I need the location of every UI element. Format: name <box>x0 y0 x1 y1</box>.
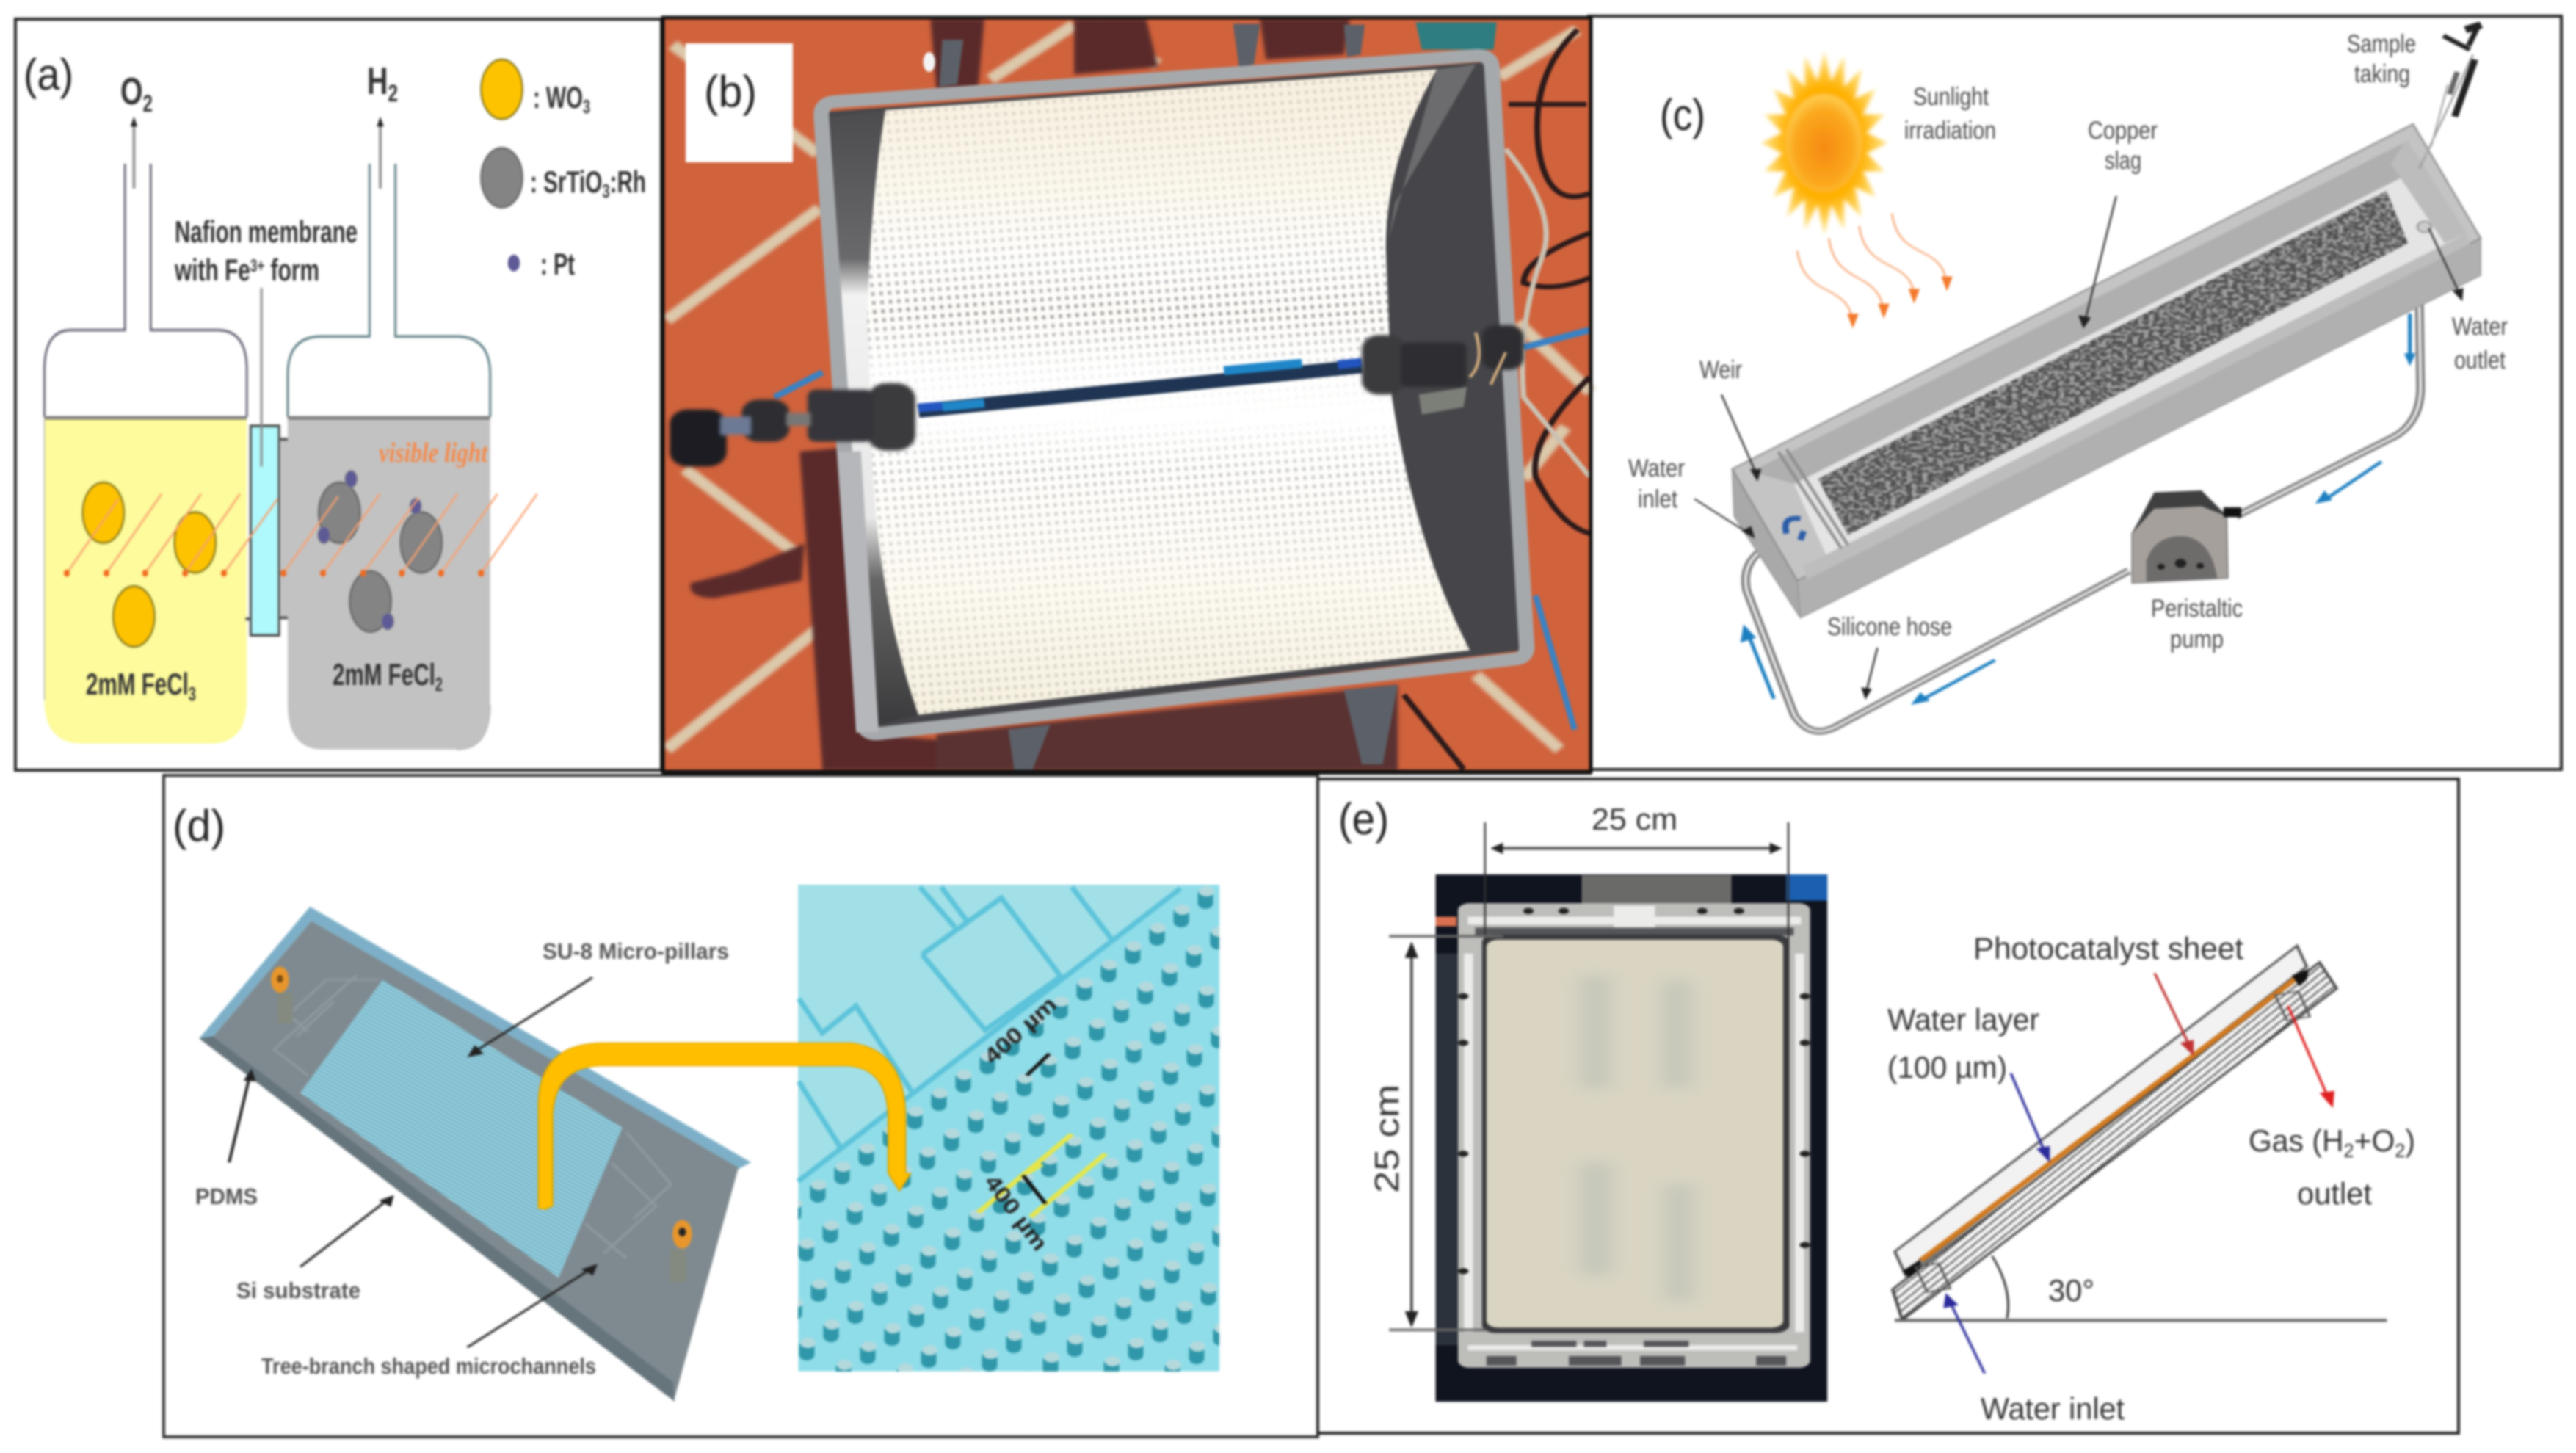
Pt co-catalyst dots <box>318 471 421 630</box>
leader arrow: Si substrate <box>300 1195 394 1267</box>
trough top rim <box>1733 124 2481 581</box>
leaders, call-out arrow and dimension marks <box>229 977 1106 1347</box>
label: water layer: Water layer <box>1887 1002 2039 1037</box>
inset chamber region <box>798 885 1183 1182</box>
mortar lines <box>667 25 1591 750</box>
label: water inlet <box>1628 454 1685 513</box>
label: gas outlet: ) <box>2405 1123 2415 1158</box>
collector interior <box>829 62 1523 730</box>
black dimension arrows <box>1023 1054 1049 1204</box>
membrane label: form <box>264 253 319 287</box>
baseline <box>1895 1318 2387 1323</box>
photo drawing <box>662 18 1591 772</box>
visible light label: visible light <box>379 438 488 468</box>
label: gas outlet: outlet <box>2297 1176 2372 1211</box>
label: gas outlet: 2 <box>2344 1139 2354 1162</box>
trough left end face <box>1733 469 1801 618</box>
label: gas outlet: +O <box>2354 1123 2395 1158</box>
right compartment: FeCl2 solution <box>281 418 490 750</box>
cream cable <box>1506 149 1589 477</box>
panel: (d) microfluidic reactor with SU-8 micro-pillars <box>164 772 1592 1437</box>
vertical dimension: side 25 cm <box>1389 936 1503 1330</box>
legend text WO3: : WO <box>533 80 605 115</box>
legend text SrTiO3:Rh: : SrTiO <box>530 164 632 199</box>
label: sunlight irradiation: irradiation <box>1904 117 1996 145</box>
left wing of reflector <box>832 110 918 727</box>
SU-8 micro-pillar field <box>300 979 623 1278</box>
cell drawing <box>44 59 537 750</box>
yellow call-out arrow <box>538 1043 911 1209</box>
yellow dimension lines <box>978 1134 1106 1217</box>
legend text WO3: 3 <box>583 95 590 117</box>
label: water inlet: inlet <box>1638 485 1677 513</box>
water inlet swirl <box>1785 518 1804 540</box>
blue hoses <box>774 330 1589 730</box>
right end inner wall <box>2391 139 2467 243</box>
gas label O2: O <box>120 70 150 113</box>
left white rim at gap <box>849 452 868 732</box>
membrane label <box>174 214 358 287</box>
arrow: H2 out <box>378 124 382 189</box>
arrow: O2 out <box>131 124 136 189</box>
red arrow: gas outlet <box>2288 1006 2334 1108</box>
red stub <box>1436 916 1456 927</box>
label: peristaltic pump: Peristaltic <box>2151 595 2243 623</box>
white bolt <box>924 52 935 72</box>
tape at top of photo <box>1581 875 1732 910</box>
label (d): (d) <box>173 801 225 850</box>
membrane pointer <box>260 288 264 466</box>
panel a border <box>15 19 661 770</box>
label: 400 um upper: 400 µm <box>980 992 1062 1069</box>
label: gas outlet <box>2249 1123 2415 1211</box>
label: sample taking: taking <box>2354 60 2410 88</box>
horizontal dimension: top 25 cm <box>1485 822 1788 1330</box>
flask outlines <box>44 164 490 750</box>
device main surface <box>213 921 739 1397</box>
arrow head: H2 <box>377 117 384 126</box>
blue arrow heads <box>1741 353 2415 705</box>
label: PDMS: PDMS <box>195 1184 258 1209</box>
sheet shading bands <box>1580 975 1694 1302</box>
tree-branch microchannels left <box>274 975 379 1076</box>
leader lines <box>1694 196 2461 695</box>
label: Si substrate: Si substrate <box>236 1278 360 1303</box>
reflector sheet <box>858 65 1481 720</box>
label: water layer: (100 µm) <box>1887 1050 2007 1084</box>
sampling pipette <box>2420 25 2481 169</box>
photo background <box>1436 874 1827 1402</box>
label: water layer <box>1887 1002 2039 1084</box>
frame rim <box>821 56 1527 733</box>
red arrow: photocatalyst sheet <box>2155 974 2194 1056</box>
glass tube <box>918 366 1362 411</box>
gas label H2: H <box>367 60 395 103</box>
legend swatch: Pt <box>508 255 520 272</box>
brick ground <box>662 18 1591 772</box>
sloped reactor: hatched support <box>1893 963 2337 1320</box>
label (a): (a) <box>23 50 73 99</box>
blue sections of tube <box>918 362 1362 408</box>
label: gas outlet: 2 <box>2395 1139 2405 1162</box>
panel: (c) copper slag trough reactor <box>1589 16 2561 769</box>
reactor photo and diagram <box>1389 822 2387 1402</box>
leader arrow: microchannels <box>468 1264 598 1347</box>
WO3 particles <box>83 482 216 647</box>
panel e border <box>1318 779 2459 1433</box>
copper slag bed <box>1818 191 2408 535</box>
device edge face <box>199 1036 675 1402</box>
trough floor <box>1794 171 2467 561</box>
legend swatch: SrTiO3:Rh <box>481 148 523 208</box>
leader arrow: PDMS <box>229 1069 256 1162</box>
label: water outlet: Water <box>2452 313 2508 341</box>
trough drawing <box>1694 25 2481 731</box>
inlet and outlet ports <box>1915 991 2310 1292</box>
port left <box>271 967 293 1023</box>
arrow head: O2 <box>131 117 137 126</box>
solution label FeCl3: 3 <box>189 683 196 705</box>
inset channel walls <box>798 887 1180 1181</box>
device blue rim <box>199 907 751 1169</box>
near inner rim <box>1804 233 2470 580</box>
label: 400 um lower: 400 µm <box>979 1170 1052 1255</box>
label: silicone hose: Silicone hose <box>1827 613 1952 641</box>
gas label H2: 2 <box>388 80 398 106</box>
panel b border <box>663 18 1591 772</box>
drawing of device and inset background <box>199 885 1219 1402</box>
panel: (e) photocatalyst sheet panel reactor <box>1318 779 2459 1433</box>
panel: (b) compound parabolic collector photo <box>662 18 1591 772</box>
solution label FeCl2: 2 <box>435 673 443 695</box>
label: sunlight irradiation: Sunlight <box>1913 83 1989 111</box>
ray arrow tips <box>64 570 484 577</box>
panel c border <box>1589 16 2561 769</box>
far inner wall <box>1751 142 2414 484</box>
label: gas outlet: Gas (H <box>2249 1123 2346 1158</box>
sun rays wavy arrows <box>1797 214 1946 318</box>
legend swatch: WO3 <box>481 59 523 119</box>
membrane label: Nafion membrane <box>175 214 358 249</box>
label: SU-8 micro-pillars: SU-8 Micro-pillars <box>543 938 729 964</box>
membrane label: with Fe <box>175 253 281 287</box>
blue corner <box>1786 874 1827 901</box>
label: peristaltic pump: pump <box>2170 626 2224 653</box>
solution label FeCl2: 2mM FeCl <box>333 657 478 692</box>
label: copper slag: Copper <box>2088 117 2158 145</box>
metal frame <box>1458 903 1810 1368</box>
sloped reactor: glass cover <box>1895 946 2307 1275</box>
gas label O2: 2 <box>143 90 153 117</box>
label: sample taking: Sample <box>2347 30 2416 58</box>
label: top 25 cm: 25 cm <box>1592 802 1677 836</box>
label: peristaltic pump <box>2151 595 2243 653</box>
Nafion membrane <box>250 426 279 635</box>
label: water outlet: outlet <box>2454 347 2506 374</box>
photocatalyst sheet <box>1487 940 1783 1327</box>
shadows on the ground <box>690 19 1398 770</box>
sealing blobs <box>1902 969 2309 1278</box>
solution label FeCl3: 2mM FeCl <box>86 667 231 701</box>
30 degree arc <box>1992 1256 2009 1318</box>
silicone hose <box>1746 302 2420 731</box>
label: water outlet <box>2452 313 2508 374</box>
label: water inlet: Water <box>1628 454 1685 482</box>
port right <box>670 1220 692 1282</box>
tree-branch microchannels right <box>585 1132 671 1258</box>
visible light rays <box>67 494 537 573</box>
frame inner gasket <box>1482 935 1789 1333</box>
teal object top right <box>1416 22 1497 50</box>
ray arrow heads <box>1847 277 1953 329</box>
peristaltic pump <box>2132 490 2241 583</box>
panel: (a) two-compartment Z-scheme cell <box>15 19 661 770</box>
side shade of background <box>1436 954 1458 1345</box>
label: copper slag <box>2088 117 2158 175</box>
left compartment: FeCl3 solution <box>44 418 247 744</box>
leader heads <box>1741 288 2464 700</box>
label: copper slag: slag <box>2105 147 2141 175</box>
panel b bottom line over d <box>662 770 1592 775</box>
right wing highlight <box>1389 65 1476 238</box>
leader arrow: SU-8 <box>468 977 592 1057</box>
weir <box>1778 449 1848 548</box>
membrane connector stubs <box>245 439 288 619</box>
blue arrow: water layer <box>2011 1073 2050 1162</box>
legend text Pt: : Pt <box>540 247 575 281</box>
frame bolts <box>1458 908 1810 1275</box>
clip and wire <box>1419 333 1506 414</box>
cables on the right <box>1404 30 1591 769</box>
left connector <box>670 383 915 466</box>
legend text SrTiO3:Rh: 3 <box>602 180 610 202</box>
water outlet hole <box>2417 221 2431 232</box>
label: water inlet: Water inlet <box>1981 1391 2125 1426</box>
frame highlights <box>1464 906 1804 1350</box>
label: tree-branch shaped microchannels: Tree-branch shaped microchannels <box>261 1353 596 1379</box>
legend text SrTiO3:Rh: :Rh <box>610 164 646 199</box>
blue flow arrows <box>1749 314 2410 699</box>
magnified inset background <box>799 885 1219 1372</box>
frame dark notches <box>1476 927 1793 1366</box>
blue arrow: water inlet <box>1943 1293 1984 1374</box>
label: sample taking <box>2347 30 2416 88</box>
inset pillars <box>798 886 1219 1372</box>
right connector <box>1362 325 1523 394</box>
sun <box>1761 51 1887 235</box>
label box (b): (b) <box>704 67 757 116</box>
membrane label: 3+ <box>250 256 264 276</box>
label: side 25 cm: 25 cm <box>1368 1084 1406 1193</box>
label: 30 degrees: 30° <box>2048 1273 2094 1308</box>
label: photocatalyst sheet: Photocatalyst sheet <box>1973 931 2243 965</box>
vertical dimension arrow heads <box>1405 941 1418 1327</box>
label: weir: Weir <box>1699 356 1742 384</box>
sloped reactor: photocatalyst layer <box>1921 974 2303 1261</box>
SrTiO3:Rh particles <box>319 482 442 632</box>
label box (b) <box>686 43 793 162</box>
label (c): (c) <box>1660 90 1705 139</box>
label: sunlight irradiation <box>1904 83 1996 145</box>
panel d border <box>164 775 1318 1437</box>
mount brackets <box>940 23 1398 770</box>
trough front face <box>1797 238 2481 618</box>
label (e): (e) <box>1338 794 1389 844</box>
horizontal dimension arrow heads <box>1490 843 1782 854</box>
